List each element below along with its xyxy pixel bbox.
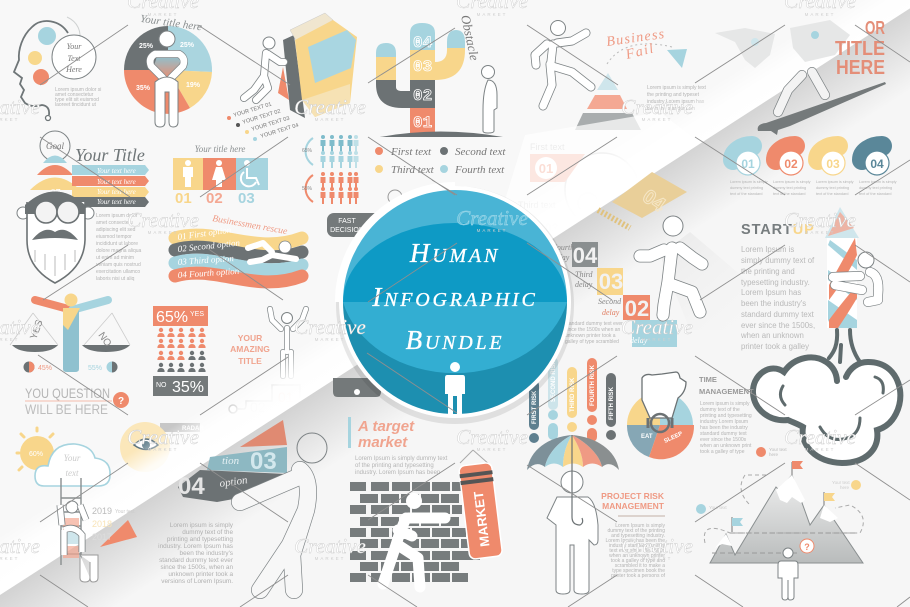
- panel: pie chart with person: 25%: [139, 43, 154, 50]
- title text: UMAN: [432, 245, 500, 267]
- heading: obstacle: Obstacle: [458, 14, 482, 62]
- panel: umbrella man: and typesetting industry.: [611, 533, 665, 539]
- heading: your title here (large): HERE: [836, 57, 885, 79]
- panel: man pushing book: YOUR TEXT 04: [260, 123, 299, 140]
- panel: head profile: Text: [67, 54, 81, 63]
- panel: pie chart with person: 19%: [186, 82, 201, 89]
- panel: startup text: typesetting industry.: [741, 278, 810, 287]
- panel: time management watch: dummy text of the: [700, 407, 740, 413]
- panel: time management watch: Lorem ipsum is simply: [700, 401, 750, 407]
- panel: people statistics: 55%: [302, 186, 313, 192]
- panel: your amazing title person: 02: [250, 399, 266, 415]
- callout: fast decision: [327, 190, 402, 237]
- panel: delay step tags: Fourth: [551, 243, 574, 252]
- panel: delay step tags: unknown printer took a: [565, 333, 616, 339]
- watermarks: Creative: [784, 425, 856, 449]
- panel: time management watch: when an unknown print: [700, 443, 752, 449]
- panel: four bean steps: text of the standard: [773, 192, 806, 196]
- panel: big white head ghost: First text: [530, 142, 565, 152]
- panel: hipster with stacked hat: veniam quis nostrud: [96, 262, 141, 268]
- panel: startup text: standard dummy text: [741, 310, 815, 319]
- watermarks: Creative: [621, 315, 693, 339]
- yellow 04 tag: [598, 172, 687, 228]
- panel: startup text: ever since the 1500s,: [741, 321, 815, 330]
- panel: startup text: when an unknown: [740, 331, 804, 340]
- panel: scale man yes no: YES: [28, 318, 46, 341]
- panel: startup text: STARTUP: [741, 222, 815, 238]
- panel: a target market heading: A target: [357, 418, 415, 435]
- yellow 04 tag: 04: [638, 186, 670, 217]
- panel: business rescue swimmer: 01 First option: [177, 224, 232, 242]
- panel: four bean steps: [730, 146, 897, 196]
- panel: man pushing book: YOUR TEXT 02: [242, 109, 281, 126]
- panel: time management watch: [627, 372, 754, 459]
- panel: time management watch: has been the industry: [700, 425, 748, 431]
- panel: four bean steps: Lorem ipsum is simply: [859, 180, 897, 184]
- panel: pie chart with person: [124, 13, 212, 127]
- panel: mountain and goals: ?: [804, 542, 810, 552]
- panel: business rescue swimmer: [175, 214, 302, 282]
- panel: radar eye: RADAR: [182, 426, 204, 432]
- panel: delay step tags: 02: [625, 296, 649, 321]
- panel: mountain and goals: Your text: [769, 447, 787, 452]
- watermarks: MARKET: [642, 117, 672, 122]
- panel: time management watch: took a galley of type: [700, 449, 745, 455]
- panel: four bean steps: Lorem ipsum is simply: [773, 180, 811, 184]
- legend: cactus: Second text: [455, 146, 506, 158]
- panel: big white head ghost: [518, 142, 639, 235]
- panel: central title circle: [335, 182, 574, 424]
- panel: delay step tags: galley of type scrambled: [565, 339, 619, 345]
- watermarks: MARKET: [642, 556, 672, 561]
- panel: business rescue swimmer: 03 Third option: [177, 253, 235, 267]
- panel: sun cloud ladder: 2018: [92, 519, 112, 529]
- panel: four bean steps: 03: [826, 157, 840, 171]
- text block: lorem left: industry. Lorem Ipsum has: [158, 543, 233, 550]
- panel: hipster with stacked hat: laboris nisi ut aliq: [96, 276, 135, 282]
- panel: delay step tags: delay: [602, 308, 620, 317]
- panel: delay step tags: delay: [630, 336, 648, 345]
- panel: hipster with stacked hat: dolore magna aliqua: [96, 248, 142, 254]
- panel: people statistics: 65%: [302, 148, 313, 154]
- title text: B: [406, 325, 425, 355]
- panel: 65 yes 35 no people chart: [153, 306, 208, 396]
- watermarks: Creative: [621, 534, 693, 558]
- panel: four bean steps: text of the standard: [816, 192, 849, 196]
- panel: umbrella man: industry standard dummy: [609, 543, 665, 549]
- panel: time management watch: MANAGEMENT: [699, 387, 754, 396]
- watermarks: Creative: [127, 425, 199, 449]
- watermarks: MARKET: [148, 230, 178, 235]
- panel: brick wall: [350, 482, 480, 582]
- panel: umbrella man: type specimen book the: [612, 568, 665, 574]
- panel: kicking man and pyramid: industry Lorem ipsum has: [647, 99, 705, 105]
- title text: H: [409, 238, 432, 268]
- panel: scale man yes no: ?: [118, 396, 124, 407]
- legend: cactus: [375, 146, 506, 176]
- panel: time management watch: ever since the 1500s: [700, 437, 747, 443]
- watermarks: MARKET: [477, 12, 507, 17]
- panel: startup text: Lorem Ipsum has: [741, 288, 801, 297]
- panel: delay step tags: delay: [575, 280, 593, 289]
- panel: startup text: simply dummy text of: [741, 256, 815, 265]
- panel: a target market heading: [348, 417, 448, 476]
- watermarks: Creative: [294, 315, 366, 339]
- panel: kicking man and pyramid: Business: [605, 27, 666, 50]
- panel: 65 yes 35 no people chart: 65%: [156, 309, 188, 326]
- panel: time management watch: industry Lorem Ipsum: [700, 419, 748, 425]
- panel: sun cloud ladder: Your: [64, 453, 81, 463]
- watermarks: MARKET: [805, 12, 835, 17]
- panel: head profile: Here: [65, 65, 82, 74]
- icon: market punching bag: [459, 450, 503, 560]
- panel: four bean steps: dummy text printing: [859, 186, 892, 190]
- panel: hipster with stacked hat: ut enim ad minim: [96, 255, 134, 261]
- heading: your title here (large): [835, 18, 885, 79]
- panel: hipster with stacked hat: incididunt ut labore: [96, 241, 138, 247]
- panel: sun cloud ladder: Your text: [115, 509, 135, 515]
- panel: big white head ghost: 03: [545, 221, 559, 235]
- panel: business rescue swimmer: 02 Second option: [177, 237, 241, 254]
- legend: cactus: Fourth text: [454, 164, 505, 176]
- panel: scale man yes no: YOU QUESTION: [25, 385, 110, 401]
- panel: pie chart with person: 25%: [180, 42, 195, 49]
- watermarks: MARKET: [477, 447, 507, 452]
- watermarks: Creative: [294, 95, 366, 119]
- panel: kicking man and pyramid: been the standard sin: [647, 106, 695, 112]
- text block: lorem left: printing and typesetting: [167, 536, 233, 543]
- icon: standing person side: [482, 66, 497, 133]
- panel: cactus chart: 04: [413, 34, 433, 52]
- panel: your amazing title person: YOUR: [238, 333, 262, 343]
- heading: your title here (large): OR: [865, 18, 885, 38]
- legend: cactus: Third text: [391, 164, 435, 176]
- watermarks: MARKET: [477, 228, 507, 233]
- panel: three squares man woman wheelchair: 03: [238, 190, 255, 207]
- panel: big white head ghost: 01: [539, 161, 553, 176]
- watermarks: MARKET: [315, 337, 345, 342]
- watermarks: Creative: [456, 425, 528, 449]
- panel: kicking man and pyramid: the printing and typeset: [647, 92, 700, 98]
- panel: head profile: Your: [67, 42, 82, 51]
- text block: lorem left: since the 1500s, when an: [161, 564, 233, 571]
- watermarks: Creative: [456, 206, 528, 230]
- panel: vertical risk pills: THIRD RISK: [570, 377, 576, 412]
- panel: hipster with stacked hat: adipiscing elit sed: [96, 227, 136, 233]
- panel: vertical risk pills: [529, 357, 616, 443]
- panel: four bean steps: text of the standard: [859, 192, 892, 196]
- panel: umbrella man: dummy text of the printing: [607, 528, 665, 534]
- panel: three squares man woman wheelchair: Your title here: [195, 144, 245, 154]
- panel: time management watch: standard dummy text: [700, 431, 747, 437]
- title text: NFOGRAPHIC: [383, 289, 538, 311]
- panel: phone: [333, 378, 381, 397]
- watermarks: Creative: [127, 208, 199, 232]
- panel: umbrella man: text ever since the 1500s: [609, 548, 665, 554]
- panel: sun cloud ladder: text: [66, 468, 79, 478]
- panel: delay step tags: Second: [598, 297, 622, 306]
- watermarks: MARKET: [642, 337, 672, 342]
- panel: carried stack 03 04 option: 03: [250, 448, 277, 475]
- watermarks: Creative: [294, 534, 366, 558]
- panel: hipster with stacked hat: Your text here: [97, 178, 136, 186]
- panel: four bean steps: text of the standard: [730, 192, 763, 196]
- panel: startup text: been the industry's: [741, 299, 806, 308]
- text block: lorem left: standard dummy text ever: [159, 557, 234, 564]
- panel: mountain and goals: here: [840, 485, 850, 490]
- panel: three squares man woman wheelchair: 02: [206, 190, 223, 207]
- panel: your amazing title person: 01: [278, 389, 294, 405]
- text block: lorem left: unknown printer took a: [168, 571, 233, 578]
- panel: four bean steps: 02: [784, 157, 798, 171]
- watermarks: MARKET: [148, 447, 178, 452]
- panel: cactus chart: [376, 23, 503, 137]
- watermarks: MARKET: [148, 12, 178, 17]
- panel: sun cloud ladder: 60%: [29, 451, 43, 458]
- panel: vertical risk pills: FOURTH RISK: [590, 364, 596, 406]
- panel: scale man yes no: NO: [96, 330, 113, 349]
- panel: time management watch: EAT: [641, 434, 653, 440]
- panel: delay step tags: 03: [599, 269, 623, 294]
- panel: head profile: laoreet tincidunt ut: [55, 102, 96, 108]
- panel: umbrella man: scrambled it to make a: [615, 563, 665, 569]
- callout: fast decision: FAST: [338, 218, 356, 225]
- callout: fast decision: DECISION: [330, 227, 364, 234]
- panel: four bean steps: dummy text printing: [730, 186, 763, 190]
- panel: people statistics: [302, 135, 358, 204]
- panel: carried stack 03 04 option: option: [219, 474, 249, 490]
- panel: four bean steps: 04: [870, 157, 884, 171]
- text block: lorem left: versions of Lorem Ipsum.: [161, 578, 233, 585]
- panel: mountain and goals: Your text: [832, 480, 850, 485]
- panel: delay step tags: delay: [552, 253, 570, 262]
- panel: sun cloud ladder: 2019: [92, 506, 112, 516]
- watermarks: Creative: [621, 95, 693, 119]
- panel: hipster with stacked hat: Your text here: [97, 188, 136, 196]
- panel: 65 yes 35 no people chart: NO: [156, 382, 167, 389]
- panel: four bean steps: dummy text printing: [816, 186, 849, 190]
- panel: head profile: Lorem ipsum dolor si: [55, 87, 101, 93]
- panel: scale man yes no: WILL BE HERE: [25, 401, 108, 417]
- icon: man carrying load: [240, 433, 327, 590]
- panel: scale man yes no: 45%: [38, 365, 52, 372]
- panel: hipster with stacked hat: Goal: [46, 141, 64, 151]
- panel: umbrella man: Lorem Ipsum has been the: [606, 538, 665, 544]
- panel: your amazing title person: AMAZING: [230, 344, 270, 354]
- panel: umbrella man: took a galley of type and: [611, 558, 665, 564]
- icon: punching man: [383, 493, 445, 587]
- panel: mountain and goals: Your text: [709, 505, 727, 510]
- panel: cactus chart: 02: [413, 87, 432, 105]
- panel: radar eye: [120, 422, 204, 472]
- panel: time management watch: printing and typesetting: [700, 413, 752, 419]
- panel: vertical risk pills: FIRST RISK: [532, 390, 538, 424]
- panel: big white head ghost: Third text: [518, 200, 556, 210]
- panel: business rescue swimmer: Businessmen rescue: [211, 214, 288, 237]
- panel: umbrella man: MANAGEMENT: [602, 501, 665, 511]
- panel: delay step tags: since the 1500s when an: [565, 327, 621, 333]
- panel: barber pole, man and cloud: [753, 207, 900, 463]
- panel: four bean steps: 01: [741, 157, 755, 171]
- panel: four bean steps: dummy text printing: [773, 186, 806, 190]
- text block: lorem left: dummy text of the: [182, 529, 233, 536]
- panel: delay step tags: standard dummy text ever: [565, 321, 623, 327]
- panel: running man with long shadow: [640, 216, 770, 330]
- watermarks: MARKET: [805, 447, 835, 452]
- panel: cactus chart: 03: [413, 58, 432, 76]
- panel: umbrella man: printer took a persons of: [611, 573, 666, 579]
- panel: umbrella man: when an unknown printer: [609, 553, 665, 559]
- panel: umbrella man: PROJECT RISK: [601, 491, 665, 501]
- watermarks: MARKET: [315, 556, 345, 561]
- panel: hipster with stacked hat: Lorem ipsum dolor: [96, 213, 138, 219]
- panel: hipster with stacked hat: amet consectetu: [96, 220, 133, 226]
- panel: umbrella man: Lorem Ipsum is simply: [615, 523, 665, 529]
- panel: hipster with stacked hat: eiusmod tempor: [96, 234, 132, 240]
- panel: hipster with stacked hat: Your text here: [97, 198, 136, 206]
- watermarks: MARKET: [805, 230, 835, 235]
- panel: startup text: printer took a galley: [741, 342, 809, 351]
- panel: business rescue swimmer: 04 Fourth option: [177, 266, 240, 280]
- panel: startup text: the printing and: [741, 267, 795, 276]
- panel: hipster with stacked hat: Your Title: [75, 145, 145, 165]
- panel: head profile: type elit sit euismod: [55, 97, 99, 103]
- panel: a target market heading: market: [358, 434, 408, 451]
- panel: delay step tags: [551, 242, 677, 347]
- panel: legs and board in top right: [758, 72, 886, 135]
- panel: time management watch: TIME: [699, 375, 717, 384]
- panel: your amazing title person: TITLE: [238, 356, 262, 366]
- panel: pie chart with person: 35%: [136, 85, 151, 92]
- panel: hipster with stacked hat: exercitation ullamco: [96, 269, 140, 275]
- panel: scale man yes no: 55%: [88, 365, 102, 372]
- legend: cactus: First text: [390, 146, 432, 158]
- panel: time management watch: SLEEP: [663, 431, 684, 445]
- panel: man pushing book: YOUR TEXT 03: [251, 116, 290, 133]
- panel: carried stack 03 04 option: [178, 420, 287, 502]
- panel: hipster with stacked hat: [17, 131, 149, 283]
- panel: startup text: [740, 222, 815, 351]
- panel: vertical risk pills: SECOND RISK: [551, 360, 557, 402]
- panel: umbrella man: [527, 435, 666, 594]
- panel: startup text: Lorem Ipsum is: [741, 245, 794, 254]
- panel: four bean steps: Lorem ipsum is simply: [816, 180, 854, 184]
- panel: kicking man and pyramid: Lorem ipsum is simply text: [647, 85, 707, 91]
- panel: head profile: amet consectetur: [55, 92, 94, 98]
- panel: four bean steps: Lorem ipsum is simply: [730, 180, 768, 184]
- icon: market punching bag: MARKET: [471, 490, 492, 548]
- watermarks: MARKET: [315, 117, 345, 122]
- white patch behind first text: [505, 112, 700, 270]
- text block: lorem left: Lorem ipsum is simply: [170, 522, 234, 529]
- title text: I: [371, 282, 384, 312]
- panel: delay step tags: Third: [575, 270, 593, 279]
- panel: carried stack 03 04 option: 04: [178, 473, 205, 500]
- panel: man pushing book: [227, 13, 357, 141]
- panel: head profile: [14, 17, 101, 120]
- panel: hipster with stacked hat: 07: [50, 188, 61, 199]
- text block: lorem left: been the industry's: [180, 550, 233, 557]
- panel: a target market heading: of the printing and typesetting: [355, 463, 434, 469]
- panel: 65 yes 35 no people chart: 35%: [172, 379, 204, 396]
- panel: world map: [715, 20, 850, 68]
- watermarks: Creative: [784, 208, 856, 232]
- panel: three squares man woman wheelchair: [173, 144, 268, 207]
- panel: mountain and goals: [696, 447, 863, 600]
- heading: your title here (large): TITLE: [835, 38, 885, 60]
- panel: carried stack 03 04 option: tion: [222, 455, 240, 467]
- panel: kicking man and pyramid: [535, 20, 707, 130]
- panel: 65 yes 35 no people chart: YES: [190, 311, 204, 318]
- panel: scale man yes no: [10, 294, 130, 417]
- panel: man pushing book: YOUR TEXT 01: [233, 102, 272, 119]
- panel: cactus chart: 01: [413, 114, 432, 132]
- panel: sun cloud ladder: 2017: [92, 532, 112, 542]
- panel: a target market heading: industry. Lorem Ipsum has been: [355, 470, 440, 476]
- title text: UNDLE: [425, 332, 504, 354]
- panel: a target market heading: Lorem Ipsum is simply dummy text: [355, 456, 448, 462]
- panel: vertical risk pills: FIFTH RISK: [609, 386, 615, 420]
- panel: three squares man woman wheelchair: 01: [175, 190, 192, 207]
- panel: your amazing title person: [229, 309, 306, 415]
- panel: mountain and goals: here: [769, 452, 779, 457]
- panel: pie chart with person: Your title here: [139, 13, 203, 33]
- panel: sun cloud ladder: [17, 428, 137, 582]
- icon: person in circle: [445, 362, 465, 414]
- panel: kicking man and pyramid: Fail: [623, 41, 656, 63]
- panel: hipster with stacked hat: Your text here: [97, 167, 136, 175]
- panel: delay step tags: 04: [573, 243, 598, 268]
